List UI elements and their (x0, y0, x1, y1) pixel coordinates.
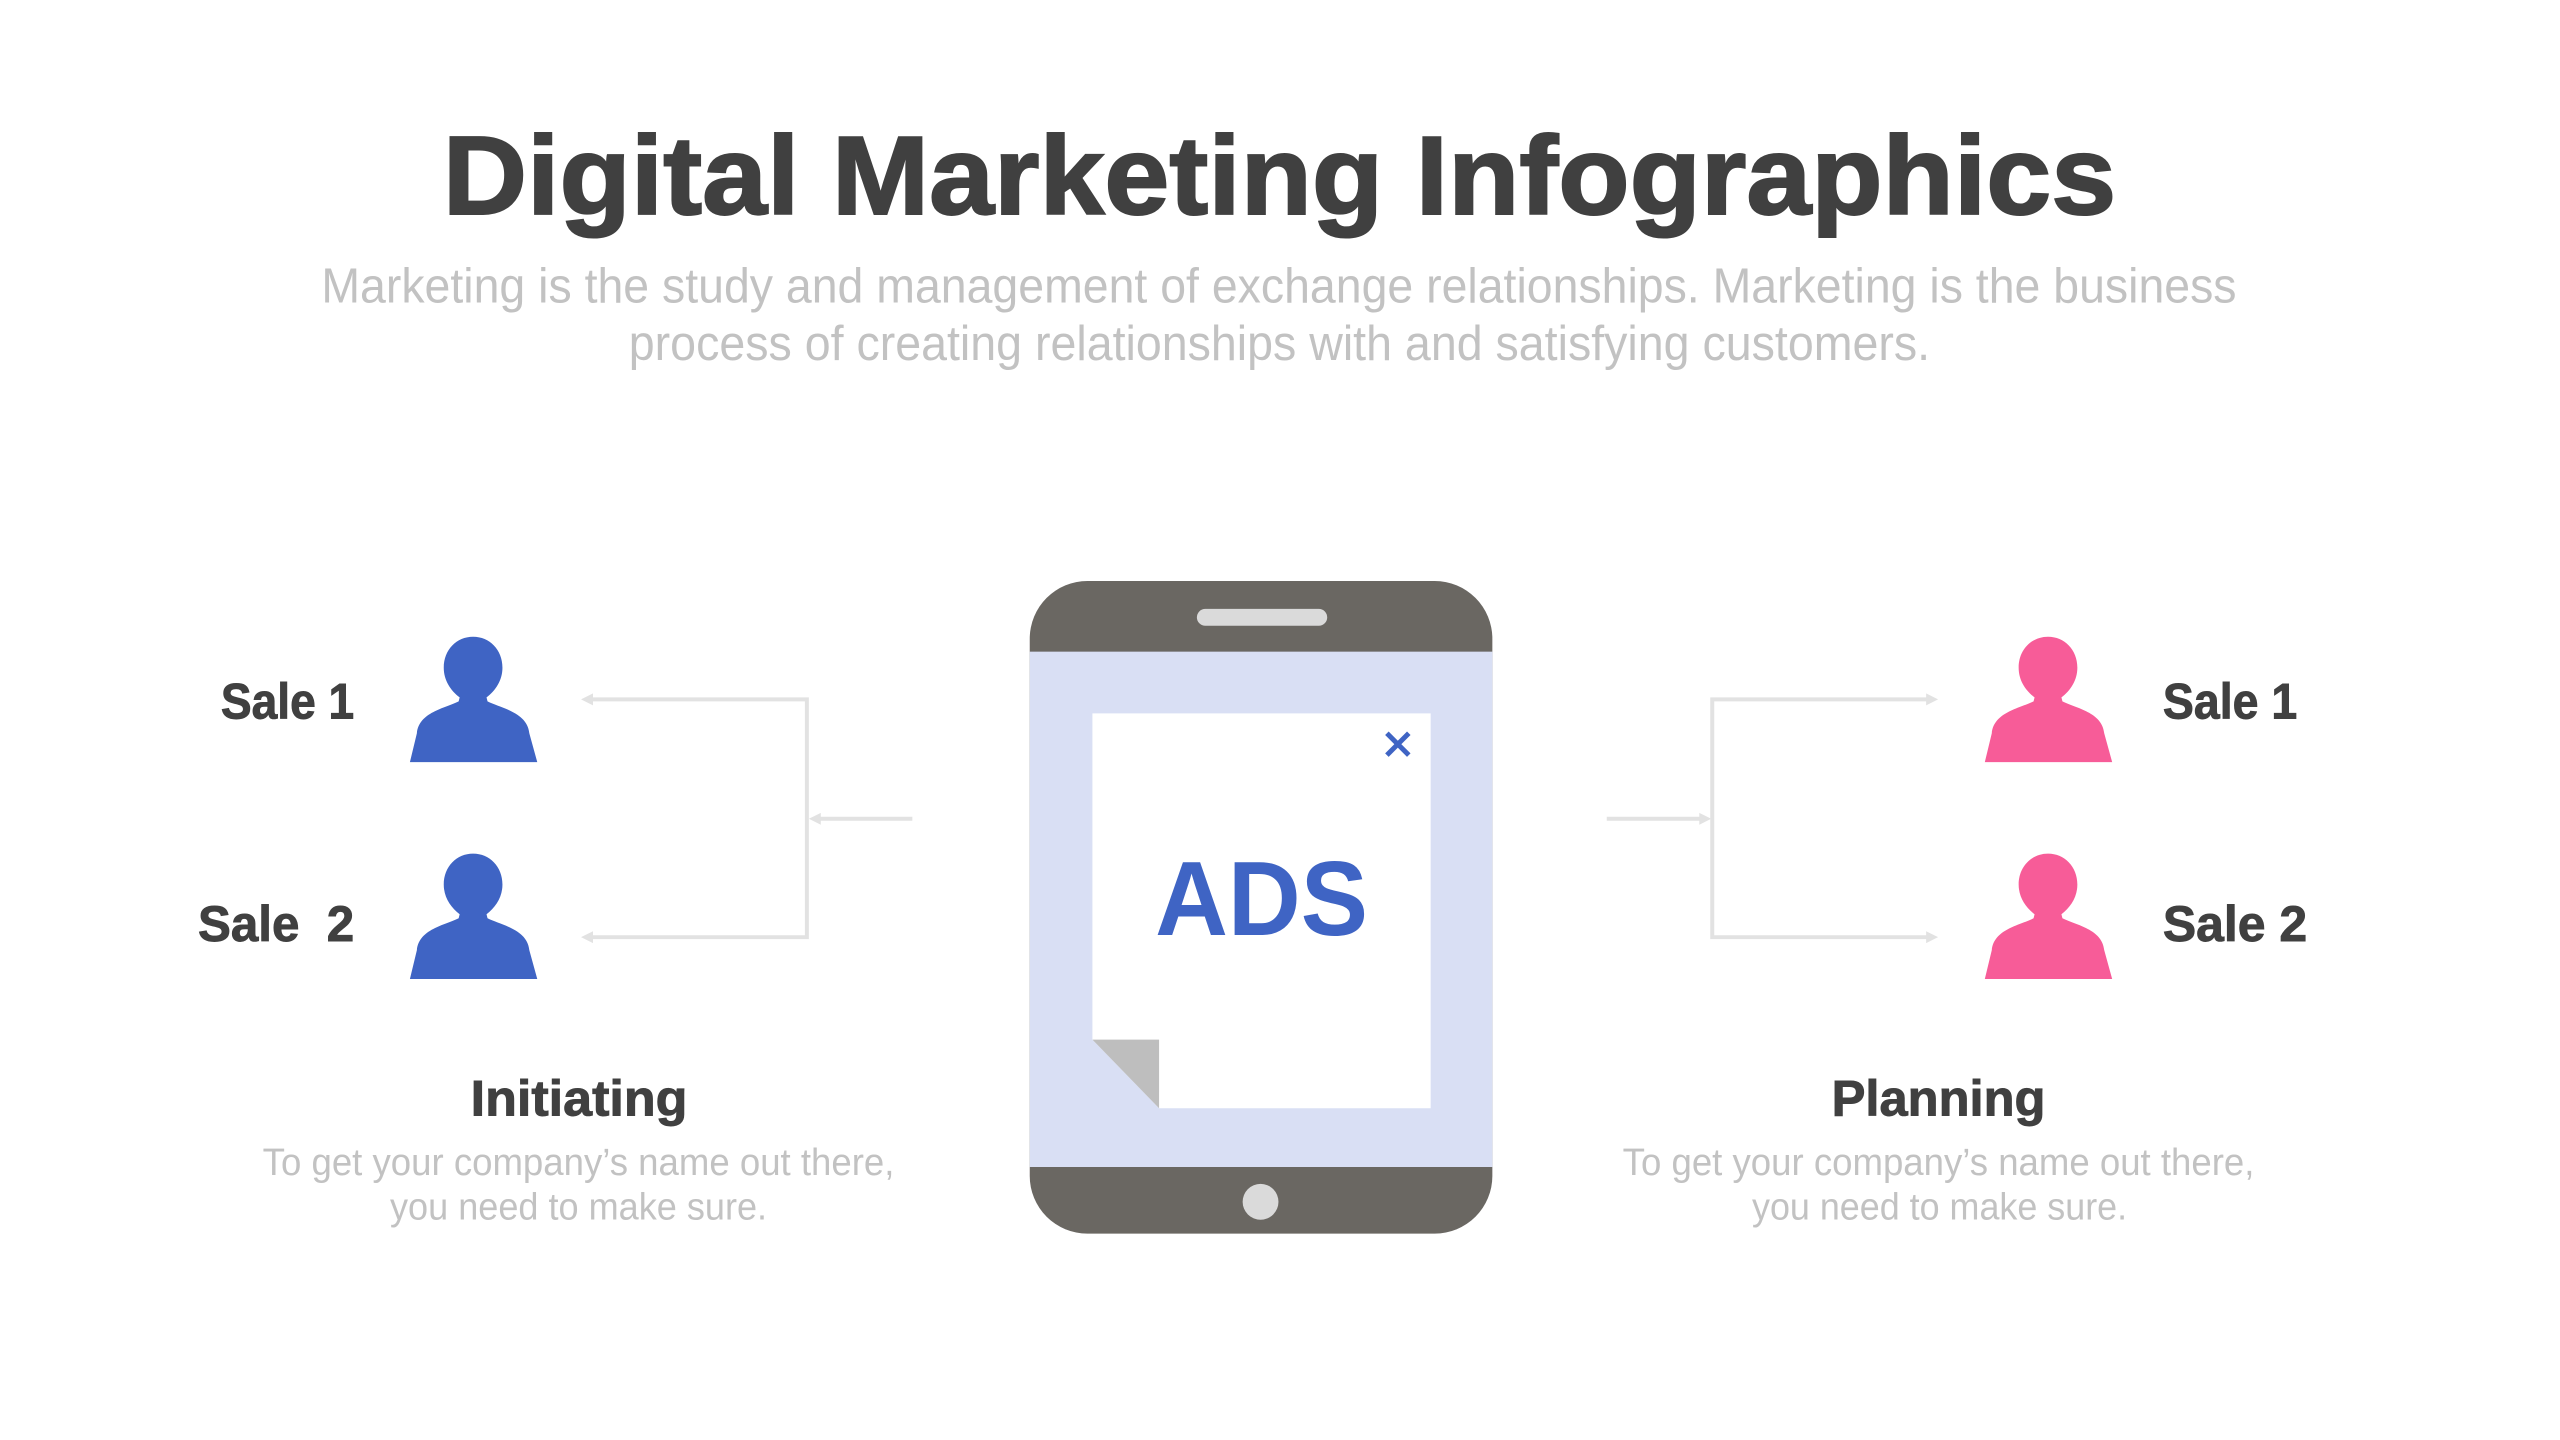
ADS text: ADS (1155, 841, 1368, 958)
heading: Initiating: Initiating (471, 1070, 687, 1126)
text block: Planning description: To get your company’s name out there, (1623, 1142, 2254, 1184)
paper fold (1092, 1040, 1159, 1108)
arrow: right bracket connector (1607, 693, 1938, 943)
label: left Sale 1: Sale 1 (221, 673, 354, 729)
close icon (1387, 733, 1409, 755)
text block: Initiating description: you need to make sure. (390, 1187, 767, 1229)
heading: Planning: Planning (1832, 1070, 2046, 1126)
icon: blue person 1 (410, 637, 537, 762)
home button (1243, 1184, 1278, 1220)
subtitle text block: process of creating relationships with and satisfying customers. (629, 317, 1930, 371)
text block: Initiating description: To get your company’s name out there, (263, 1142, 894, 1184)
icon: blue person 2 (410, 854, 537, 979)
label: right Sale 1: Sale 1 (2163, 673, 2297, 729)
icon: tablet with ADS (1030, 581, 1492, 1234)
panel: left Initiating (198, 637, 912, 1229)
text block: Planning description (1623, 1142, 2254, 1229)
text block: Initiating description (263, 1142, 894, 1229)
arrow: left bracket connector (581, 693, 912, 943)
subtitle text block: Marketing is the study and management of exchange relationships. Marketing is the business (321, 259, 2237, 313)
speaker (1197, 609, 1327, 626)
panel: right Planning (1607, 637, 2307, 1229)
tablet screen (1030, 652, 1492, 1167)
text block: Planning description: you need to make sure. (1752, 1187, 2127, 1229)
icon: pink person 2 (1985, 854, 2112, 979)
label: left Sale 2: Sale 2 (198, 896, 354, 952)
title: Digital Marketing Infographics (443, 113, 2116, 238)
label: right Sale 2: Sale 2 (2163, 896, 2307, 952)
tablet body (1030, 581, 1492, 1234)
ad paper (1092, 713, 1431, 1108)
icon: pink person 1 (1985, 637, 2112, 762)
subtitle text block (321, 259, 2237, 371)
